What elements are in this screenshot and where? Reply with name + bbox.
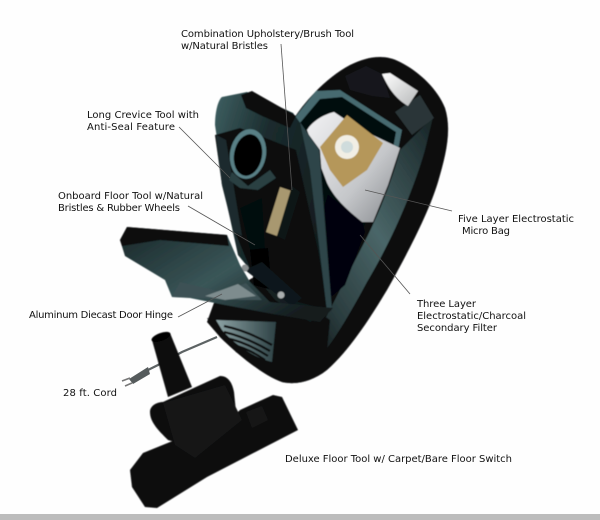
door hinge bbox=[205, 284, 256, 300]
brush tool head bbox=[277, 186, 300, 240]
bottom scan strip bbox=[0, 514, 600, 520]
door dark interior bbox=[215, 128, 328, 310]
vent panel bbox=[216, 320, 276, 362]
rear shell bbox=[207, 57, 448, 383]
power cord bbox=[122, 337, 217, 386]
vent slots bbox=[224, 326, 272, 362]
switch bbox=[246, 406, 268, 428]
vacuum cleaner body bbox=[120, 57, 448, 383]
label: secondary filter: Secondary Filter bbox=[417, 323, 498, 334]
label: secondary filter: Three Layer bbox=[416, 299, 477, 310]
label: micro bag: Micro Bag bbox=[462, 226, 510, 237]
bag opening centre bbox=[341, 141, 353, 153]
door inner arm bbox=[216, 135, 242, 236]
label: door hinge: Aluminum Diecast Door Hinge bbox=[29, 310, 173, 321]
door right rim bbox=[300, 122, 332, 312]
floor tool tube bbox=[250, 248, 272, 290]
label: secondary filter: Electrostatic/Charcoal bbox=[417, 311, 526, 322]
tube opening bbox=[150, 330, 172, 344]
lower door flap bbox=[120, 227, 333, 322]
compartment interior bbox=[299, 97, 396, 262]
port collar bbox=[229, 170, 276, 190]
label: floor tool: Deluxe Floor Tool w/ Carpet/Bare Floor Switch bbox=[285, 454, 512, 465]
label: onboard floor tool: Bristles & Rubber Wheels bbox=[58, 203, 180, 214]
teal rim of compartment bbox=[293, 90, 402, 250]
label: micro bag: Five Layer Electrostatic bbox=[458, 214, 574, 225]
nozzle base bbox=[130, 395, 298, 508]
base vent block bbox=[207, 300, 330, 383]
brush tool bristles bbox=[266, 187, 292, 236]
wheel housing bbox=[150, 376, 236, 450]
tube neck bbox=[152, 333, 192, 397]
bag collar card bbox=[320, 115, 383, 187]
leader lines bbox=[178, 44, 452, 317]
deluxe floor tool bbox=[130, 330, 298, 508]
door top cap bbox=[241, 91, 296, 128]
label: upholstery tool: w/Natural Bristles bbox=[181, 41, 268, 52]
flap lower inner bbox=[172, 282, 262, 300]
teal shell band bbox=[303, 117, 433, 360]
plug bbox=[129, 367, 150, 384]
label: crevice tool: Long Crevice Tool with bbox=[87, 110, 199, 121]
cord line bbox=[146, 337, 217, 371]
crevice tool bbox=[240, 198, 265, 258]
flap top edge bbox=[120, 227, 229, 246]
hood bbox=[163, 385, 242, 458]
label: onboard floor tool: Onboard Floor Tool w/Natural bbox=[58, 191, 203, 202]
front door bbox=[215, 92, 332, 322]
label: upholstery tool: Combination Upholstery/Brush Tool bbox=[181, 29, 354, 40]
label: cord: 28 ft. Cord bbox=[63, 388, 117, 399]
bag opening bbox=[335, 135, 359, 159]
plug prongs bbox=[122, 378, 132, 386]
upper shell highlight bbox=[395, 95, 434, 135]
handle opening bbox=[382, 73, 418, 106]
micro bag bbox=[307, 112, 400, 222]
label: crevice tool: Anti-Seal Feature bbox=[87, 122, 175, 133]
secondary filter area bbox=[318, 195, 365, 305]
hose port opening bbox=[231, 132, 265, 178]
right wheel bbox=[278, 292, 284, 298]
handle top bbox=[345, 66, 390, 98]
hose port ring bbox=[226, 126, 270, 182]
left wheel bbox=[242, 264, 248, 272]
onboard floor tool bbox=[245, 262, 302, 306]
